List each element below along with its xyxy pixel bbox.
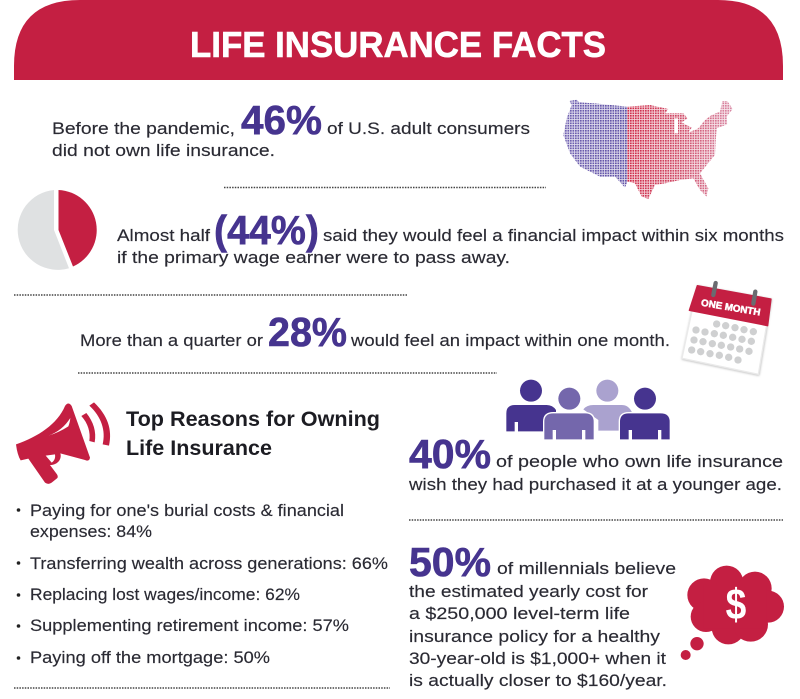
fact: 50% of millennials: is actually closer to $160/year. bbox=[409, 671, 667, 690]
icon: dotted US map bbox=[563, 100, 732, 199]
fact: 50% of millennials: 30-year-old is $1,000+ when it bbox=[409, 649, 666, 668]
fact: 44% financial impact within six months bbox=[117, 207, 784, 267]
fact: 40% wish they purchased younger bbox=[408, 431, 783, 494]
fact: 40% wish they purchased younger: wish they had purchased it at a younger age. bbox=[408, 475, 782, 494]
fact: 44% financial impact within six months: if the primary wage earner were to pass away. bbox=[117, 248, 510, 267]
title: LIFE INSURANCE FACTS bbox=[190, 24, 606, 65]
heading: top reasons: Top Reasons for Owning bbox=[126, 408, 380, 431]
fact: 50% of millennials bbox=[409, 539, 676, 690]
fact: 50% of millennials: insurance policy for a healthy bbox=[409, 627, 661, 646]
fact: 50% of millennials: of millennials believe bbox=[497, 559, 676, 578]
heading: top reasons: Life Insurance bbox=[126, 437, 272, 460]
fact: 28% impact within one month: More than a quarter or bbox=[80, 331, 263, 350]
list: reasons for owning life insurance: Paying for one's burial costs & financial bbox=[30, 501, 344, 520]
fact: 44% financial impact within six months: Almost half bbox=[117, 226, 210, 245]
fact: 44% financial impact within six months: (44%) bbox=[214, 207, 319, 253]
list: reasons for owning life insurance bbox=[17, 501, 388, 667]
icon: megaphone bbox=[16, 402, 110, 484]
icon: calendar bbox=[680, 280, 773, 376]
heading: top reasons bbox=[126, 408, 380, 460]
list: reasons for owning life insurance: Supplementing retirement income: 57% bbox=[30, 616, 349, 635]
fact: 28% impact within one month: would feel an impact within one month. bbox=[350, 331, 670, 350]
fact: 46% without life insurance: 46% bbox=[241, 97, 322, 143]
fact: 28% impact within one month: 28% bbox=[268, 309, 347, 355]
fact: 44% financial impact within six months: said they would feel a financial impact within six months bbox=[323, 226, 784, 245]
icon: thought bubble with dollar sign: $ bbox=[726, 582, 746, 630]
fact: 46% without life insurance: Before the pandemic, bbox=[52, 119, 235, 138]
fact: 50% of millennials: a $250,000 level-term life bbox=[409, 604, 630, 623]
fact: 28% impact within one month bbox=[80, 309, 670, 355]
list: reasons for owning life insurance: Replacing lost wages/income: 62% bbox=[30, 585, 300, 604]
list: reasons for owning life insurance: Paying off the mortgage: 50% bbox=[30, 648, 270, 667]
list: reasons for owning life insurance: Transferring wealth across generations: 66% bbox=[30, 554, 388, 573]
list: reasons for owning life insurance: expenses: 84% bbox=[30, 522, 152, 541]
fact: 46% without life insurance: did not own life insurance. bbox=[52, 141, 275, 160]
icon: group of people bbox=[506, 380, 670, 440]
icon: thought bubble with dollar sign bbox=[680, 566, 784, 660]
fact: 40% wish they purchased younger: 40% bbox=[409, 431, 491, 477]
icon: calendar: ONE MONTH bbox=[700, 298, 761, 319]
fact: 40% wish they purchased younger: of people who own life insurance bbox=[496, 452, 783, 471]
fact: 50% of millennials: the estimated yearly cost for bbox=[409, 582, 648, 601]
pie chart: 44% bbox=[18, 190, 97, 270]
fact: 50% of millennials: 50% bbox=[409, 539, 491, 585]
title banner bbox=[14, 0, 783, 80]
fact: 46% without life insurance bbox=[52, 97, 530, 160]
fact: 46% without life insurance: of U.S. adult consumers bbox=[327, 119, 530, 138]
